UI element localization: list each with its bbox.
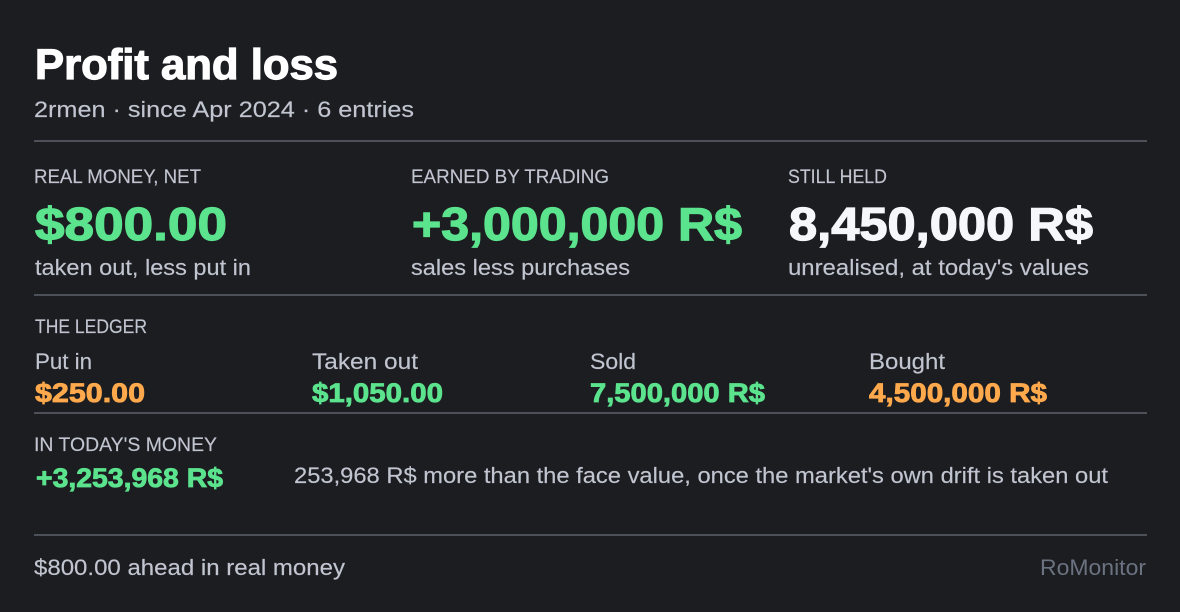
stat: real money net: REAL MONEY, NET: [34, 166, 201, 188]
stat: real money net: $800.00: [35, 198, 227, 250]
panel: the ledger: [35, 316, 1047, 408]
ledger: bought: 4,500,000 R$: [869, 378, 1047, 408]
ledger: taken out: [312, 349, 443, 408]
ledger: sold: Sold: [590, 349, 636, 374]
ledger: sold: [590, 349, 765, 408]
stat: earned by trading: sales less purchases: [411, 255, 630, 280]
footer: [34, 555, 1146, 580]
ledger: put in: Put in: [35, 349, 92, 374]
inflation-adjusted value: +3,253,968 R$: [36, 463, 223, 493]
stat: still held: 8,450,000 R$: [789, 198, 1093, 250]
ledger heading: THE LEDGER: [35, 316, 147, 338]
section heading: IN TODAY'S MONEY: [34, 434, 217, 456]
panel: headline figures: [34, 166, 1093, 280]
ledger: bought: [869, 349, 1047, 408]
stat: earned by trading: [411, 166, 742, 280]
stat: real money net: [34, 166, 251, 280]
explanation: 253,968 R$ more than the face value, once the market's own drift is taken out: [294, 463, 1108, 488]
subtitle: 2rmen · since Apr 2024 · 6 entries: [34, 97, 414, 122]
stat: earned by trading: +3,000,000 R$: [412, 198, 742, 250]
panel: in today's money: [34, 434, 1108, 493]
footer summary: $800.00 ahead in real money: [34, 555, 345, 580]
ledger: put in: $250.00: [35, 378, 145, 408]
stat: still held: unrealised, at today's values: [788, 255, 1089, 280]
ledger: taken out: Taken out: [312, 349, 418, 374]
ledger: sold: 7,500,000 R$: [590, 378, 765, 408]
stat: earned by trading: EARNED BY TRADING: [411, 166, 609, 188]
title: Profit and loss: [35, 41, 338, 89]
stat: real money net: taken out, less put in: [35, 255, 251, 280]
header: [34, 41, 414, 122]
stat: still held: [788, 166, 1093, 280]
ledger: taken out: $1,050.00: [312, 378, 443, 408]
ledger: bought: Bought: [869, 349, 945, 374]
ledger: put in: [35, 349, 145, 408]
brand: RoMonitor: [1040, 555, 1146, 580]
stat: still held: STILL HELD: [788, 166, 887, 188]
